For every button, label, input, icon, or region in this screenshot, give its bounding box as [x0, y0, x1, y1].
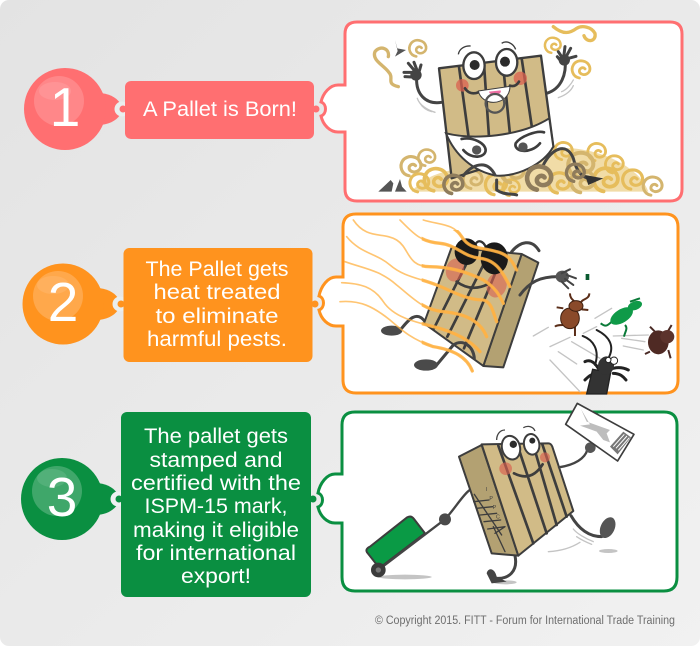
side stamp: I [486, 487, 487, 493]
side stamp: P [493, 505, 497, 511]
cheeks [499, 452, 550, 475]
flicked speck [586, 274, 589, 280]
step 3 text box: for international [136, 542, 296, 565]
step 3 number badge [21, 458, 126, 540]
step 1 number badge [24, 68, 130, 150]
step 3 text box: The pallet gets [144, 425, 288, 448]
beetle: brown [555, 293, 589, 336]
front arm and hand [520, 269, 576, 295]
planks [498, 444, 567, 543]
boarding ticket [566, 403, 634, 461]
step 2 text box [118, 248, 318, 362]
pallet body [459, 443, 573, 556]
step 3 text box: stamped and [150, 449, 282, 472]
cockroach [583, 330, 628, 394]
step 1 text box: A Pallet is Born! [143, 98, 297, 121]
arms and hands [404, 47, 576, 112]
raised arm [559, 442, 596, 467]
panel 2: heat treatment [319, 214, 678, 394]
heat waves [340, 220, 517, 371]
step 2 number badge: 2 [48, 271, 78, 333]
step 3 text box: ISPM-15 mark, [144, 495, 288, 518]
suitcase [366, 517, 445, 577]
smile [457, 282, 488, 288]
step 1 number badge: 1 [50, 76, 80, 138]
step 3 text box: export! [181, 565, 251, 588]
mouth with pacifier [465, 82, 519, 113]
shavings pile [401, 142, 662, 196]
step 3 text box [116, 412, 316, 597]
step 3 number badge: 3 [47, 466, 77, 528]
step 2 text box: to eliminate [156, 305, 278, 328]
diaper [446, 118, 553, 176]
cheeks [456, 72, 527, 92]
step 3 text box: making it eligible [133, 519, 299, 542]
side stamp: C [496, 514, 500, 520]
side stamp [474, 487, 505, 552]
flying shavings [374, 27, 595, 87]
speed lines [533, 308, 648, 392]
panel 1: a pallet is born [321, 22, 682, 201]
legs [463, 149, 603, 195]
beetle: dark [645, 325, 674, 358]
sunglasses [455, 238, 508, 274]
planks [459, 58, 532, 137]
step 1 text box [120, 81, 320, 139]
step 3 text box: certified with the [131, 472, 301, 495]
shadows [378, 549, 618, 584]
beetle: green [601, 298, 643, 337]
legs [487, 515, 619, 583]
step 2 text box: harmful pests. [147, 328, 287, 351]
panel 3: certified for export [318, 403, 677, 591]
pallet body [424, 247, 538, 367]
trailing arm [439, 485, 480, 525]
copyright: © Copyright 2015. FITT - Forum for International Trade Training [375, 615, 675, 627]
back leg and upper arm [381, 243, 539, 336]
step 2 number badge [22, 264, 128, 344]
eyes [497, 426, 541, 462]
eyes [458, 42, 517, 79]
nails [378, 40, 407, 192]
pallet body [439, 56, 553, 178]
step 2 text box: The Pallet gets [146, 258, 288, 281]
step 2 text box: heat treated [154, 281, 280, 304]
smile [514, 464, 543, 476]
cheeks [443, 256, 510, 300]
front leg [414, 343, 474, 371]
planks [434, 260, 497, 348]
side stamp: P [489, 496, 493, 502]
dark foreground shavings [444, 164, 584, 194]
